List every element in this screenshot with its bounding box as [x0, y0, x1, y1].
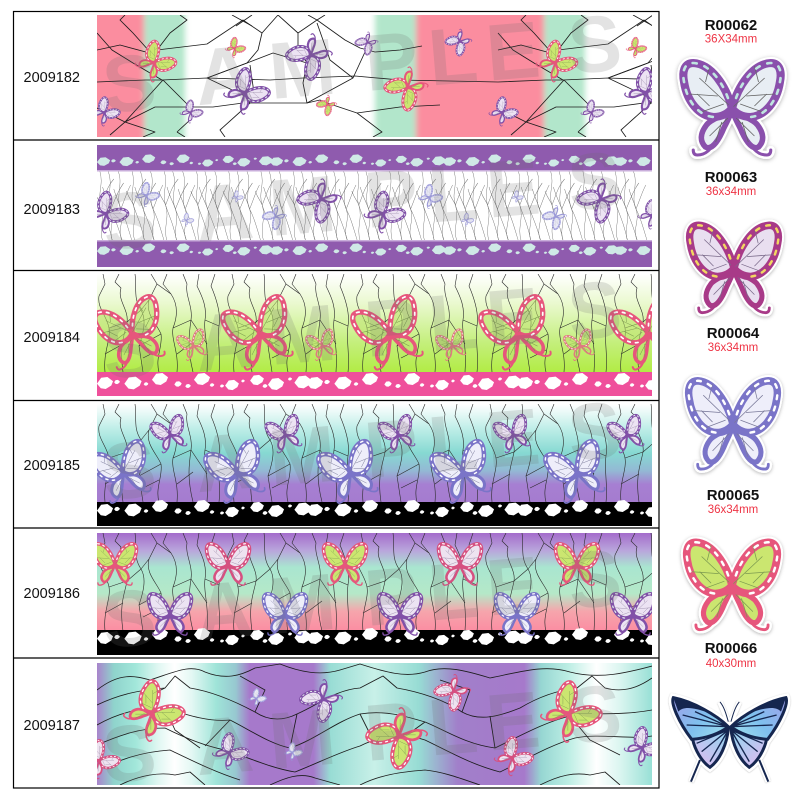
sticker code: R00062: R00062: [705, 17, 757, 34]
ribbon: 2009187 teal white purple bands: [79, 663, 664, 785]
watermark: SAMPLES row 3: SAMPLES: [99, 264, 625, 396]
sticker size: R00062: 36X34mm: [705, 34, 757, 46]
sticker: blue butterfly R00066: [673, 698, 786, 782]
sticker code: R00064: R00064: [707, 325, 760, 342]
row label: 2009183: 2009183: [24, 202, 80, 218]
ribbon: 2009186 purple mint pink gradient with black band: [97, 533, 652, 655]
sticker size: R00064: 36x34mm: [708, 342, 758, 354]
ribbon: 2009184 green gradient with pink band: [97, 274, 652, 396]
sticker code: R00065: R00065: [707, 487, 759, 504]
watermark: SAMPLES row 5: SAMPLES: [99, 533, 625, 665]
watermark: SAMPLES row 1: SAMPLES: [99, 0, 625, 130]
ribbon: 2009185 teal purple gradient with black band: [97, 404, 652, 526]
watermark: SAMPLES row 6: SAMPLES: [99, 668, 625, 800]
sticker size: R00065: 36x34mm: [708, 504, 758, 516]
watermark: SAMPLES row 4: SAMPLES: [99, 385, 625, 517]
sticker size: R00066: 40x30mm: [706, 658, 756, 670]
ribbon: 2009183 purple bands with leaf net: [97, 145, 652, 267]
sticker size: R00063: 36x34mm: [706, 186, 756, 198]
sticker: purple butterfly R00062: [683, 63, 781, 155]
sticker: periwinkle butterfly R00064: [689, 381, 777, 469]
watermark: SAMPLES row 2: SAMPLES: [99, 135, 625, 267]
ribbon: 2009182 pink and green with cracks: [97, 15, 652, 137]
sticker: magenta butterfly R00063: [690, 225, 778, 313]
row label: 2009186: 2009186: [24, 586, 80, 602]
table frame: [13, 12, 659, 788]
row label: 2009184: 2009184: [24, 330, 80, 346]
sticker code: R00066: R00066: [705, 640, 757, 657]
sticker: pink and green butterfly R00065: [687, 542, 777, 630]
row label: 2009182: 2009182: [24, 70, 80, 86]
row label: 2009187: 2009187: [24, 718, 80, 734]
row label: 2009185: 2009185: [24, 458, 80, 474]
sticker code: R00063: R00063: [705, 169, 757, 186]
